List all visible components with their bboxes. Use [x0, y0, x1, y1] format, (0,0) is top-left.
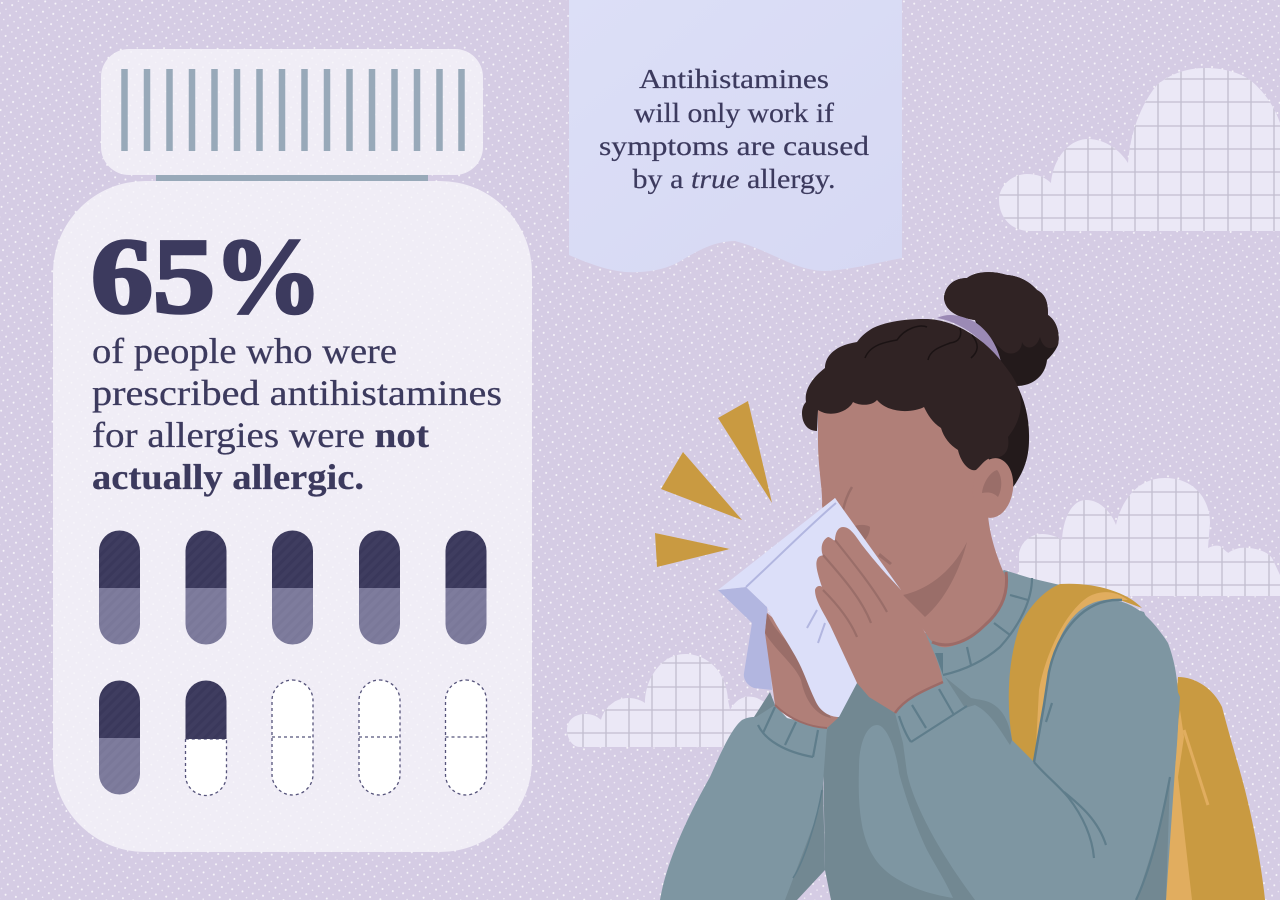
bottle body: [53, 181, 532, 852]
statistic description: for allergies were not: [92, 415, 429, 455]
nose line: [843, 487, 852, 510]
ear: [969, 456, 1017, 520]
left hand: [765, 613, 838, 728]
banner: antihistamine note: [569, 0, 902, 272]
statistic description: actually allergic.: [92, 457, 364, 497]
sweater: upper arm: [1000, 600, 1178, 900]
tissue front: [746, 498, 901, 717]
capsule 9: empty: [359, 680, 400, 795]
neck and face: [818, 385, 1007, 647]
bottle cap: [101, 49, 483, 175]
chin shadow: [903, 542, 967, 617]
sweater: chest highlight: [859, 725, 953, 898]
banner text: by a true allergy.: [632, 163, 836, 194]
statistic: 65%: 65: [91, 218, 215, 336]
capsule 3: [272, 530, 313, 644]
person sneezing: [660, 272, 1265, 900]
statistic description: [92, 331, 502, 497]
capsule 1: [99, 530, 140, 644]
bottle: [53, 49, 532, 852]
statistic description: prescribed antihistamines: [92, 373, 502, 413]
cloud: lower middle: [567, 654, 792, 747]
collar shadow: [935, 653, 943, 675]
sleeve back shadow: [754, 692, 775, 725]
pictogram: 6.5 of 10 capsules: [99, 530, 486, 796]
sweater: right side shadow: [1136, 777, 1170, 900]
strap shadow line: [1034, 600, 1122, 762]
sneeze burst marks: [655, 401, 772, 567]
statistic: 65%: %: [214, 218, 322, 336]
neck rim: [932, 572, 1007, 645]
right cuff: [899, 689, 967, 742]
cloud: middle right: [1019, 478, 1280, 596]
sweater: chest shadow: [823, 683, 975, 900]
capsule 6: [99, 680, 140, 794]
capsule 10: empty: [446, 680, 486, 795]
sweater: fold lines: [1034, 703, 1170, 900]
capsule 7: half filled: [186, 680, 226, 796]
collar: [943, 578, 1032, 675]
left arm: [660, 705, 827, 900]
backpack body: [1166, 677, 1265, 900]
backpack strap: [1009, 584, 1142, 762]
capsule 2: [186, 530, 226, 644]
hair: [802, 319, 1029, 487]
banner text: will only work if: [634, 97, 835, 128]
hair tie: [937, 315, 1001, 362]
banner text: symptoms are caused: [599, 130, 869, 161]
banner text: [599, 63, 869, 194]
capsule 8: empty: [272, 680, 313, 795]
capsule 5: [446, 530, 486, 644]
tissue: [718, 498, 850, 690]
right hand: [815, 527, 943, 713]
sweater torso: [820, 570, 1180, 900]
statistic description: of people who were: [92, 331, 397, 371]
sweater: shoulder shadow: [945, 677, 1012, 745]
bottle neck: [156, 175, 428, 181]
left cuff: [758, 707, 818, 757]
capsule 4: [359, 530, 400, 644]
hair bun: [944, 272, 1059, 386]
banner text: Antihistamines: [639, 63, 829, 94]
statistic: 65%: [91, 218, 322, 336]
cloud: top right: [999, 68, 1280, 231]
mouth: [855, 525, 892, 565]
